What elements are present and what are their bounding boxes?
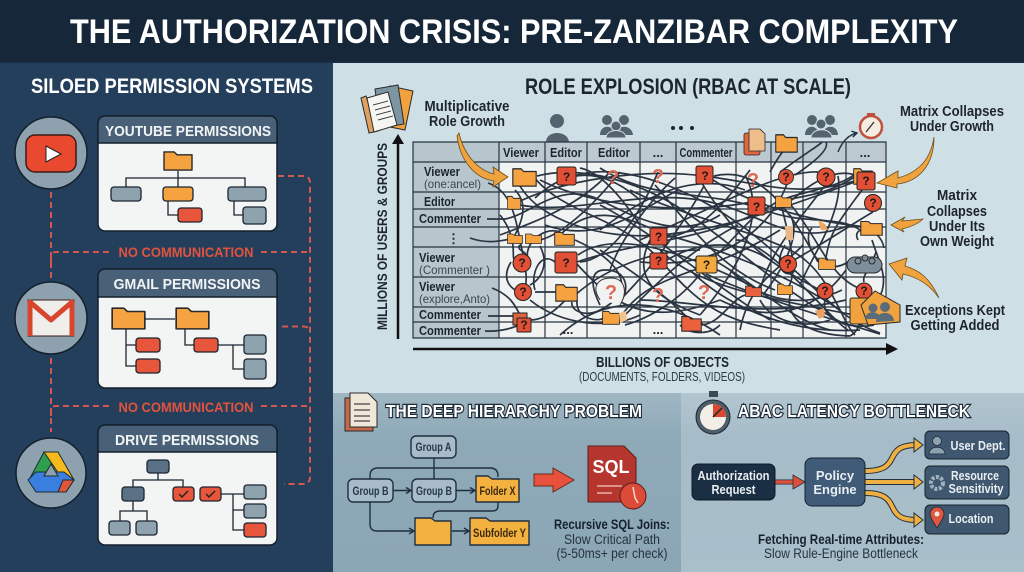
question marks <box>513 166 882 332</box>
icon: gmail <box>15 282 87 354</box>
node: user dept: User Dept. <box>950 438 1006 453</box>
node: policy engine: Policy <box>816 468 855 483</box>
node: subfolder y <box>470 518 529 545</box>
text: recursive sql joins: (5-50ms+ per check) <box>556 546 668 561</box>
question marks: ? <box>655 230 662 244</box>
node: group b middle <box>412 479 456 502</box>
label: no communication 1: NO COMMUNICATION <box>118 244 254 260</box>
callout: multiplicative role growth <box>424 99 510 130</box>
node: policy engine: Engine <box>813 482 857 497</box>
text: fetching real-time attributes: Slow Rule-Engine Bottleneck <box>764 546 918 561</box>
node: resource sensitivity <box>925 466 1009 499</box>
arrow: weight collapse <box>891 217 923 232</box>
node: folder x <box>476 476 519 502</box>
card: drive permissions <box>98 425 277 545</box>
header banner <box>0 0 1024 62</box>
arrows: attribute fetch <box>865 438 923 527</box>
cell ellipses <box>563 322 663 337</box>
card: gmail permissions <box>98 269 277 388</box>
icon: document stack <box>361 85 413 133</box>
column headers: ... <box>860 145 870 160</box>
node: folder <box>415 518 451 545</box>
question marks: ? <box>703 258 710 272</box>
tree: gmail <box>112 308 266 379</box>
node: group a: Group A <box>416 440 452 454</box>
callout: matrix collapses under growth: Matrix Collapses <box>900 104 1004 120</box>
question marks: ? <box>784 257 792 271</box>
icon: document <box>345 393 377 431</box>
column headers: Commenter <box>680 145 732 160</box>
card title: drive: DRIVE PERMISSIONS <box>115 432 259 449</box>
column headers: Viewer <box>503 145 539 160</box>
dashed no-communication connectors <box>51 176 310 484</box>
question marks: ? <box>655 254 662 268</box>
node: group b left <box>348 479 393 502</box>
text: recursive sql joins <box>554 517 670 561</box>
icon: sql document: SQL <box>592 457 630 477</box>
matrix icons <box>507 169 882 331</box>
column headers: ... <box>653 145 663 160</box>
row labels: Editor <box>424 194 455 209</box>
question marks: ? <box>563 170 570 184</box>
question marks: ? <box>562 256 570 270</box>
question marks: ? <box>607 167 619 189</box>
callout: matrix collapses under growth <box>900 104 1004 135</box>
icon: person <box>546 114 569 142</box>
row labels: Viewer <box>424 164 460 179</box>
card: youtube permissions <box>98 116 277 231</box>
icon: group <box>600 115 633 138</box>
node: policy engine <box>805 458 865 506</box>
question marks: ? <box>701 169 709 183</box>
node: subfolder y: Subfolder Y <box>473 526 526 540</box>
question marks: ? <box>605 282 617 304</box>
arrow: request to engine <box>775 475 805 489</box>
icon: stopwatch <box>860 113 882 138</box>
row labels <box>419 164 490 338</box>
icon: sql document <box>588 446 646 509</box>
callout: matrix collapses under its own weight: Collapses <box>927 204 987 220</box>
question marks: ? <box>652 285 664 307</box>
icon: drive <box>16 438 86 508</box>
node: group a <box>411 436 456 458</box>
arrow: growth collapse <box>877 137 934 188</box>
heading: siloed: SILOED PERMISSION SYSTEMS <box>31 75 313 98</box>
node: authorization request <box>692 464 775 500</box>
row labels: (explore,Anto) <box>419 292 490 306</box>
card title: youtube: YOUTUBE PERMISSIONS <box>105 123 271 140</box>
axis: y: MILLIONS OF USERS & GROUPS <box>374 143 390 330</box>
question marks: ? <box>652 166 664 188</box>
question marks: ? <box>518 256 526 270</box>
tree: drive <box>109 460 266 537</box>
icon: youtube <box>15 117 87 189</box>
row labels: Commenter <box>419 211 481 226</box>
text: recursive sql joins: Slow Critical Path <box>564 532 660 547</box>
question marks: ? <box>753 200 760 214</box>
dots <box>671 126 694 130</box>
node: location <box>925 505 1009 534</box>
row labels: Commenter <box>419 323 481 338</box>
axis: x: (DOCUMENTS, FOLDERS, VIDEOS) <box>579 370 745 384</box>
question marks: ? <box>869 196 877 210</box>
node: group b left: Group B <box>352 484 389 498</box>
text: fetching real-time attributes <box>758 532 924 561</box>
arrow: exceptions <box>889 258 939 298</box>
node: folder x: Folder X <box>480 484 516 498</box>
question marks: ? <box>782 170 790 184</box>
icon: folder <box>776 135 797 152</box>
diagram: hierarchy <box>348 436 529 545</box>
node: user dept <box>925 431 1009 459</box>
node: resource sensitivity: Sensitivity <box>948 481 1004 496</box>
text: fetching real-time attributes: Fetching Real-time Attributes: <box>758 532 924 547</box>
arrow: to sql <box>534 468 574 492</box>
callout: matrix collapses under its own weight <box>920 188 994 250</box>
callout: matrix collapses under its own weight: Own Weight <box>920 234 994 250</box>
panel: abac latency bottleneck <box>681 391 1024 572</box>
node: authorization request: Authorization <box>698 468 770 483</box>
callout: exceptions kept getting added: Getting Added <box>910 318 1000 334</box>
callout: matrix collapses under its own weight: Under Its <box>929 219 985 235</box>
heading: role explosion: ROLE EXPLOSION (RBAC AT SCALE) <box>525 74 851 99</box>
question marks: ? <box>822 170 830 184</box>
callout: multiplicative role growth: Multiplicative <box>424 99 510 115</box>
tangled permission lines <box>470 142 884 336</box>
axis: y <box>374 134 404 339</box>
question marks: ? <box>520 318 528 332</box>
node: resource sensitivity: Resource <box>951 468 999 483</box>
tree: youtube <box>111 152 266 224</box>
matrix base <box>413 142 886 338</box>
callout: multiplicative role growth: Role Growth <box>429 114 505 130</box>
row labels: Viewer <box>419 250 455 265</box>
row labels: ⋮ <box>447 231 460 246</box>
question marks: ? <box>821 284 829 298</box>
cell ellipses: ... <box>563 322 573 337</box>
panel: role explosion <box>333 63 1024 394</box>
heading: deep hierarchy: THE DEEP HIERARCHY PROBLEM <box>386 401 642 421</box>
label: no communication 2: NO COMMUNICATION <box>118 399 254 415</box>
icon: doc pile <box>744 129 765 155</box>
question marks: ? <box>698 282 710 304</box>
callout: matrix collapses under its own weight: Matrix <box>937 188 977 204</box>
heading: abac latency: ABAC LATENCY BOTTLENECK <box>738 401 970 421</box>
panel: deep hierarchy problem <box>333 393 681 572</box>
icon: group top right <box>805 115 838 138</box>
callout: matrix collapses under growth: Under Growth <box>910 119 994 135</box>
column headers <box>503 145 870 160</box>
icon: stopwatch <box>696 391 730 434</box>
callout: exceptions kept getting added: Exceptions Kept <box>905 303 1005 319</box>
card title: gmail: GMAIL PERMISSIONS <box>114 276 260 293</box>
node: group b middle: Group B <box>416 484 452 498</box>
cell ellipses: ... <box>653 322 663 337</box>
row labels: Viewer <box>419 279 455 294</box>
text: recursive sql joins: Recursive SQL Joins: <box>554 517 670 532</box>
row labels: (Commenter ) <box>419 263 490 277</box>
row labels: Commenter <box>419 307 481 322</box>
arrow: to stopwatch <box>838 133 857 152</box>
chart: permission matrix <box>413 142 900 338</box>
column headers: Editor <box>598 145 630 160</box>
axis: x: BILLIONS OF OBJECTS <box>596 355 729 371</box>
node: authorization request: Request <box>712 482 756 497</box>
callout: exceptions kept getting added <box>905 303 1005 334</box>
node: location: Location <box>948 511 994 526</box>
question marks: ? <box>860 284 868 298</box>
question marks: ? <box>519 285 527 299</box>
icon: exception folders <box>850 291 900 325</box>
column headers: Editor <box>550 145 582 160</box>
question marks: ? <box>862 174 870 188</box>
icon: group cell <box>847 255 882 273</box>
row labels: (one:ancel) <box>424 177 481 191</box>
arrow: multiplicative growth <box>457 133 508 187</box>
panel: siloed permission systems <box>0 63 333 572</box>
axis: x <box>413 343 898 384</box>
question marks: ? <box>747 170 759 192</box>
